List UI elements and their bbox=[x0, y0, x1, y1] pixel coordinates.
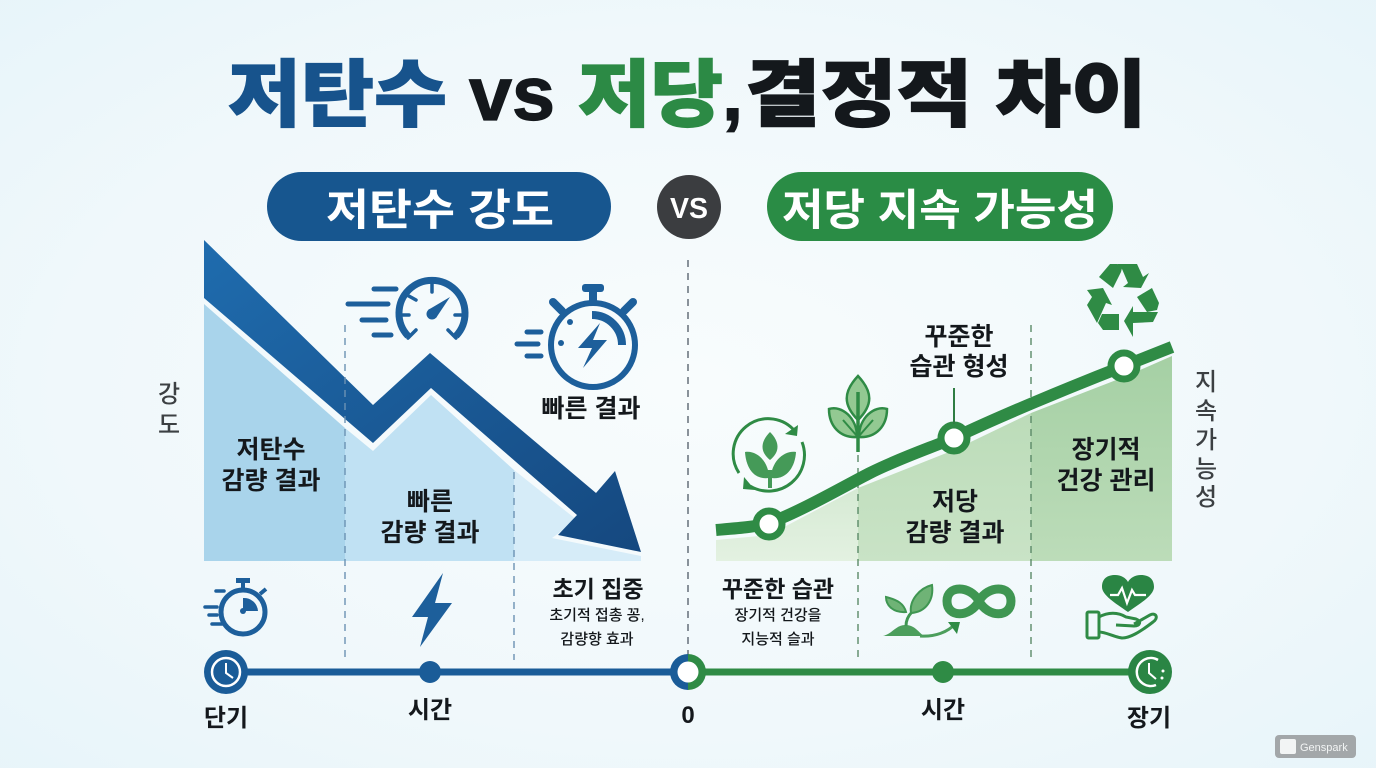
label: low sugar weight result bbox=[906, 488, 1004, 547]
label: fast weight result bbox=[381, 488, 479, 547]
watermark bbox=[1275, 735, 1356, 758]
title: 저탄수 bbox=[228, 55, 447, 136]
title: 결정적 차이 bbox=[745, 55, 1147, 136]
text block: steady habit bbox=[722, 576, 834, 648]
marker: habit bbox=[941, 425, 967, 451]
area: first section bbox=[716, 488, 858, 561]
label: fast weight result: 감량 결과 bbox=[381, 519, 479, 547]
text block: early focus bbox=[549, 576, 645, 648]
axis label: sustainability: 가 bbox=[1195, 427, 1217, 454]
icon: sprout to infinity bbox=[883, 585, 1011, 636]
axis label: intensity: 강 bbox=[158, 381, 180, 408]
area: third section bbox=[514, 470, 641, 561]
icon: heart in hand bbox=[1087, 575, 1156, 638]
title: vs bbox=[469, 52, 555, 137]
icon: lightning bolt bbox=[412, 573, 452, 647]
text block: early focus: 감량향 효과 bbox=[560, 631, 634, 648]
section dividers bbox=[345, 325, 514, 660]
icon: growth cycle bbox=[733, 419, 804, 491]
area: second section bbox=[858, 413, 1031, 561]
text block: steady habit: 꾸준한 습관 bbox=[722, 576, 834, 602]
label: time: 시간 bbox=[921, 697, 965, 724]
label: long-term health: 장기적 bbox=[1071, 436, 1141, 464]
title: , bbox=[722, 52, 743, 137]
icon: stopwatch with bolt bbox=[517, 284, 635, 387]
vs badge bbox=[657, 175, 721, 239]
axis label: sustainability: 성 bbox=[1195, 484, 1217, 511]
marker: origin ring bbox=[670, 654, 706, 690]
marker: midpoint bbox=[419, 661, 441, 683]
label: fast weight result: 빠른 bbox=[407, 488, 453, 516]
text block: early focus: 초기 집중 bbox=[552, 576, 644, 602]
pill heading: low sugar sustainability: 저당 지속 가능성 bbox=[782, 187, 1098, 235]
axis label: intensity: 도 bbox=[158, 412, 180, 439]
icon: speedometer bbox=[348, 280, 465, 338]
marker: midpoint bbox=[932, 661, 954, 683]
area: third section bbox=[1031, 356, 1172, 561]
area: second section bbox=[345, 395, 514, 561]
axis label: sustainability: 속 bbox=[1195, 398, 1217, 425]
label: steady habit formation bbox=[910, 323, 1008, 381]
axis label: sustainability bbox=[1195, 369, 1217, 511]
icon: small stopwatch bbox=[205, 578, 266, 634]
centre divider bbox=[687, 260, 689, 655]
marker: short term clock bbox=[204, 650, 248, 694]
label: short term: 단기 bbox=[204, 705, 248, 732]
label: steady habit formation: 습관 형성 bbox=[910, 353, 1008, 381]
label: low carb weight result: 감량 결과 bbox=[222, 467, 320, 495]
label: low carb weight result: 저탄수 bbox=[236, 436, 306, 464]
label: low sugar weight result: 감량 결과 bbox=[906, 519, 1004, 547]
marker: long term clock bbox=[1128, 650, 1172, 694]
label: fast result: 빠른 결과 bbox=[542, 395, 640, 423]
axis label: sustainability: 능 bbox=[1195, 456, 1217, 483]
panel: low sugar area chart bbox=[716, 325, 1172, 660]
section dividers bbox=[858, 325, 1031, 660]
title: 저당 bbox=[578, 55, 723, 136]
label: long term: 장기 bbox=[1127, 705, 1171, 732]
text block: steady habit: 장기적 건강을 bbox=[735, 607, 822, 624]
panel: low carb area chart bbox=[204, 240, 641, 660]
label: zero: 0 bbox=[681, 702, 695, 729]
label: steady habit formation: 꾸준한 bbox=[924, 323, 994, 351]
label: long-term health bbox=[1057, 436, 1155, 495]
icon: plant bbox=[829, 376, 887, 452]
icon: recycle bbox=[1087, 264, 1159, 337]
timeline: green half bbox=[688, 650, 1172, 694]
label: low carb weight result bbox=[222, 436, 320, 495]
text block: early focus: 초기적 접총 꽁, bbox=[549, 607, 645, 624]
vs badge: VS bbox=[670, 193, 708, 225]
text block: steady habit: 지능적 슬과 bbox=[741, 631, 815, 648]
label: long-term health: 건강 관리 bbox=[1057, 467, 1155, 495]
title bbox=[228, 52, 1147, 137]
line: rising sustainability bbox=[716, 347, 1172, 530]
watermark: Genspark bbox=[1300, 742, 1348, 754]
label: time: 시간 bbox=[408, 697, 452, 724]
pill heading: low carb intensity: 저탄수 강도 bbox=[326, 187, 554, 235]
axis label: intensity bbox=[158, 381, 180, 439]
leader line bbox=[953, 388, 955, 424]
timeline: blue half bbox=[204, 650, 688, 694]
pill heading: low sugar sustainability bbox=[767, 172, 1113, 241]
axis label: sustainability: 지 bbox=[1195, 369, 1217, 396]
area: first section bbox=[204, 304, 345, 561]
label: low sugar weight result: 저당 bbox=[932, 488, 978, 516]
marker: start bbox=[756, 511, 782, 537]
pill heading: low carb intensity bbox=[267, 172, 611, 241]
arrow: falling intensity bbox=[204, 240, 641, 552]
marker: long term bbox=[1111, 353, 1137, 379]
